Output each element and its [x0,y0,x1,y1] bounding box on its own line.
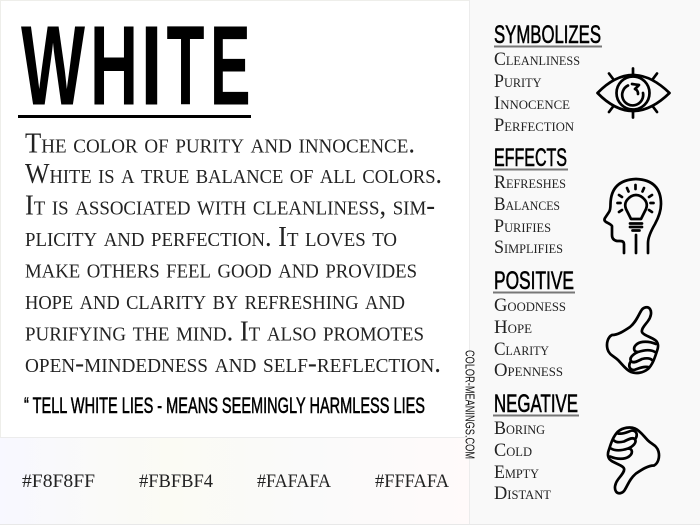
icon: thumbs down [608,428,659,493]
section: negative [493,390,579,504]
section: effects [493,144,568,258]
title: E [210,2,250,128]
title: I [140,2,162,128]
text block: description: The color of purity and innocence. [25,128,415,160]
text block: description: hope and clarity by refreshing and [25,285,405,316]
list: symbolizes: Innocence [494,93,570,114]
title: T [166,2,204,128]
text block: description: make others feel good and provides [25,254,417,284]
list: negative [494,418,551,504]
heading: symbolizes: SYMBOLIZES [494,21,601,49]
heading: negative: NEGATIVE [494,390,578,418]
list: effects [494,172,566,258]
list: effects: Balances [494,194,560,215]
title: W [21,2,85,128]
list: negative: Distant [494,483,551,504]
list: effects: Purifies [494,216,551,237]
list: effects: Simplifies [494,237,563,258]
list: symbolizes [494,49,580,136]
list: effects: Refreshes [494,172,566,193]
hex codes: #FAFAFA [257,471,331,492]
text block: description: It is associated with cleanliness, sim- [25,190,435,222]
text block: description: White is a true balance of all colors. [25,159,442,190]
list: positive [494,295,566,381]
panel: sidebar background [470,0,700,525]
text block: description [25,128,442,379]
section: symbolizes [494,21,602,136]
text block: description: open-mindedness and self-reflection. [25,348,441,379]
icon: eye [598,68,670,118]
hex codes: #FFFAFA [375,471,449,492]
heading: positive: POSITIVE [494,267,574,295]
hex codes: #FBFBF4 [139,471,213,492]
icon: thumbs up [607,307,658,373]
list: symbolizes: Purity [494,71,542,92]
list: symbolizes: Cleanliness [494,49,580,70]
section: positive [493,267,575,381]
text block: description: purifying the mind. It also promotes [25,316,424,348]
list: negative: Cold [494,440,532,461]
list: negative: Boring [494,418,545,439]
hex codes [22,471,449,492]
heading: effects: EFFECTS [494,144,567,172]
panel: colour swatch strip [0,437,469,524]
list: negative: Empty [494,462,540,483]
list: positive: Hope [494,317,532,338]
list: positive: Goodness [494,295,566,316]
quote: “ TELL WHITE LIES - MEANS SEEMINGLY HARMLESS LIES [24,393,425,418]
title: H [90,2,138,128]
title [21,2,250,128]
icon: head with light bulb [604,179,661,253]
list: positive: Openness [494,360,563,381]
list: positive: Clarity [494,339,550,360]
text block: description: plicity and perfection. It loves to [25,222,397,253]
hex codes: #F8F8FF [22,471,95,492]
list: symbolizes: Perfection [494,115,575,136]
site credit, vertical: COLOR-MEANINGS.COM [462,350,476,459]
title underline [18,115,251,118]
